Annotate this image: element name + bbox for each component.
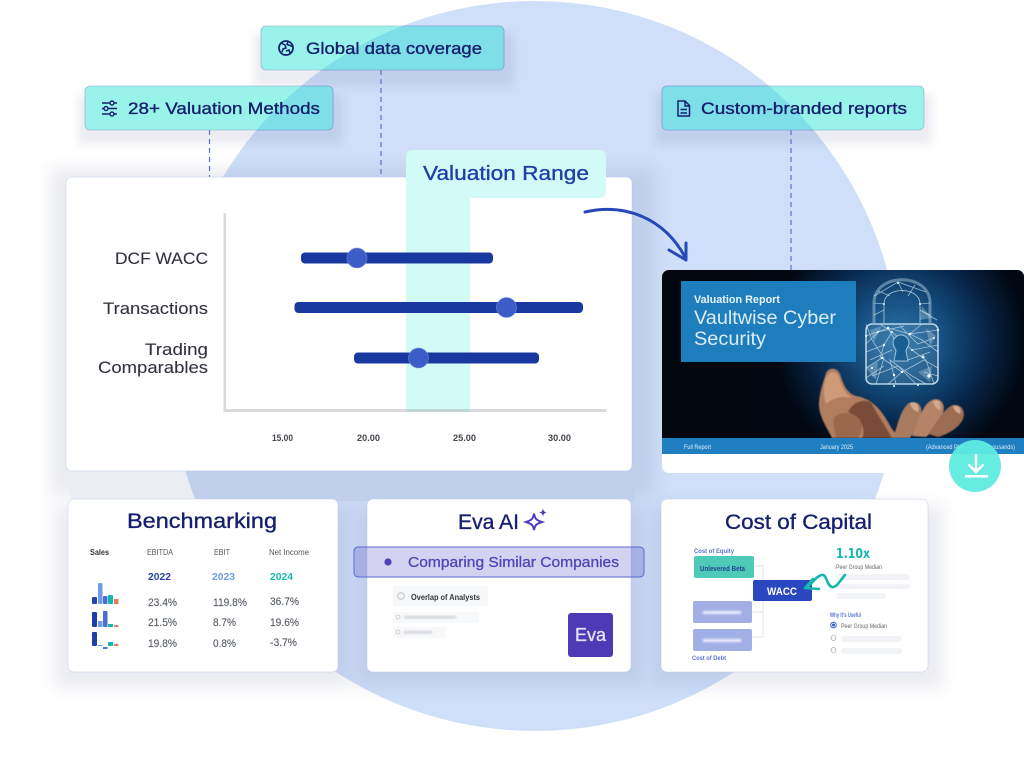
table values: 21.5% — [148, 617, 177, 629]
table header: Net Income — [269, 548, 310, 557]
axis tick labels — [272, 433, 571, 443]
axis tick labels: 15.00 — [272, 433, 293, 443]
why it's useful list: Peer Group Median — [841, 623, 887, 630]
cost of equity group: Cost of Equity — [694, 548, 734, 555]
arrow to report — [585, 209, 686, 260]
peer median metric: Peer Group Median — [836, 564, 882, 571]
feature pill: global data coverage: Global data coverage — [306, 39, 482, 58]
report footer bar: January 2025 — [820, 444, 853, 451]
hand — [819, 369, 964, 438]
cost of capital heading: Cost of Capital — [725, 511, 872, 534]
row labels — [98, 249, 208, 377]
row labels: Transactions — [103, 299, 208, 318]
table header — [90, 548, 310, 557]
cost of debt group: Cost of Debt — [692, 655, 727, 662]
panel: benchmarking — [68, 499, 338, 672]
cost of equity group: Unlevered Beta — [700, 564, 746, 573]
range bar: DCF WACC — [301, 248, 493, 268]
cost of debt group — [692, 601, 752, 662]
icon: document — [678, 101, 690, 116]
axis tick labels: 20.00 — [357, 433, 380, 443]
feature pill: valuation methods: 28+ Valuation Methods — [128, 99, 320, 118]
icon: wireframe padlock — [866, 280, 938, 384]
WACC box — [753, 580, 812, 601]
table values: 23.4% — [148, 597, 177, 609]
feature pill: custom-branded reports: Custom-branded reports — [701, 99, 907, 118]
report title box: Vaultwise Cyber — [694, 308, 837, 329]
report cover image — [662, 270, 1024, 438]
peer median metric: 1.10x — [836, 547, 871, 562]
table values: 36.7% — [270, 596, 299, 608]
icon: download button — [949, 440, 1001, 492]
Eva AI heading: Eva AI — [458, 511, 519, 534]
year labels: 2024 — [270, 572, 293, 583]
table header: Sales — [90, 548, 110, 557]
peer median metric — [836, 547, 910, 599]
report title box: Valuation Report — [694, 294, 780, 306]
row labels: Trading — [145, 340, 208, 359]
range bar: Transactions — [294, 298, 583, 318]
feature pill: global data coverage — [261, 26, 504, 70]
feature pill: valuation methods — [85, 86, 333, 130]
table values: 19.8% — [148, 638, 177, 650]
why it's useful list — [830, 613, 902, 654]
table header: EBIT — [214, 548, 230, 557]
highlight: comparing similar companies: Comparing Similar Companies — [408, 554, 619, 571]
table values: 0.8% — [213, 638, 236, 650]
panel: valuation report preview — [662, 270, 1024, 473]
Eva badge — [568, 613, 613, 657]
report title box — [681, 281, 856, 362]
WACC box: WACC — [767, 586, 797, 598]
squiggle arrow to WACC — [805, 575, 845, 589]
overlap of analysts option — [393, 586, 488, 606]
panel: valuation range chart — [66, 150, 632, 471]
valuation range band — [406, 150, 606, 412]
cost of equity group — [694, 548, 754, 578]
report title box: Security — [694, 329, 767, 350]
highlight: comparing similar companies — [354, 547, 644, 577]
table values: 19.6% — [270, 617, 299, 629]
icon: sparkle — [526, 508, 547, 530]
year labels — [148, 572, 293, 583]
table values: 8.7% — [213, 617, 236, 629]
blurred option rows — [393, 612, 479, 638]
benchmarking heading: Benchmarking — [127, 510, 277, 533]
icon: globe — [279, 41, 293, 55]
report footer bar: Full Report — [684, 444, 711, 451]
chart axes — [224, 213, 606, 412]
WACC tree connectors — [752, 566, 763, 637]
mini bar chart: row 3 — [92, 632, 118, 649]
why it's useful list: Why It's Useful — [830, 613, 861, 619]
table values: 119.8% — [213, 597, 247, 609]
table header: EBITDA — [147, 548, 174, 557]
band heading: Valuation Range — [423, 163, 589, 185]
dashed connectors — [210, 70, 791, 270]
overlap of analysts option: Overlap of Analysts — [411, 593, 481, 602]
icon: sliders — [102, 101, 117, 116]
feature pill: custom-branded reports — [662, 86, 924, 130]
row labels: Comparables — [98, 358, 208, 377]
panel: cost of capital — [661, 499, 928, 672]
range bar: Trading Comparables — [354, 348, 539, 368]
table values — [148, 596, 299, 650]
panel: Eva AI — [367, 499, 631, 672]
report footer bar — [662, 438, 1024, 454]
mini bar chart: row 2 — [92, 611, 118, 627]
year labels: 2023 — [212, 572, 235, 583]
table values: -3.7% — [270, 637, 297, 649]
background circle — [170, 1, 900, 731]
lock nodes — [865, 282, 939, 387]
axis tick labels: 30.00 — [548, 433, 571, 443]
year labels: 2022 — [148, 572, 171, 583]
Eva badge: Eva — [575, 625, 607, 645]
card drop shadows — [50, 34, 943, 688]
axis tick labels: 25.00 — [453, 433, 476, 443]
row labels: DCF WACC — [115, 249, 208, 268]
mini bar chart: row 1 — [92, 583, 118, 604]
